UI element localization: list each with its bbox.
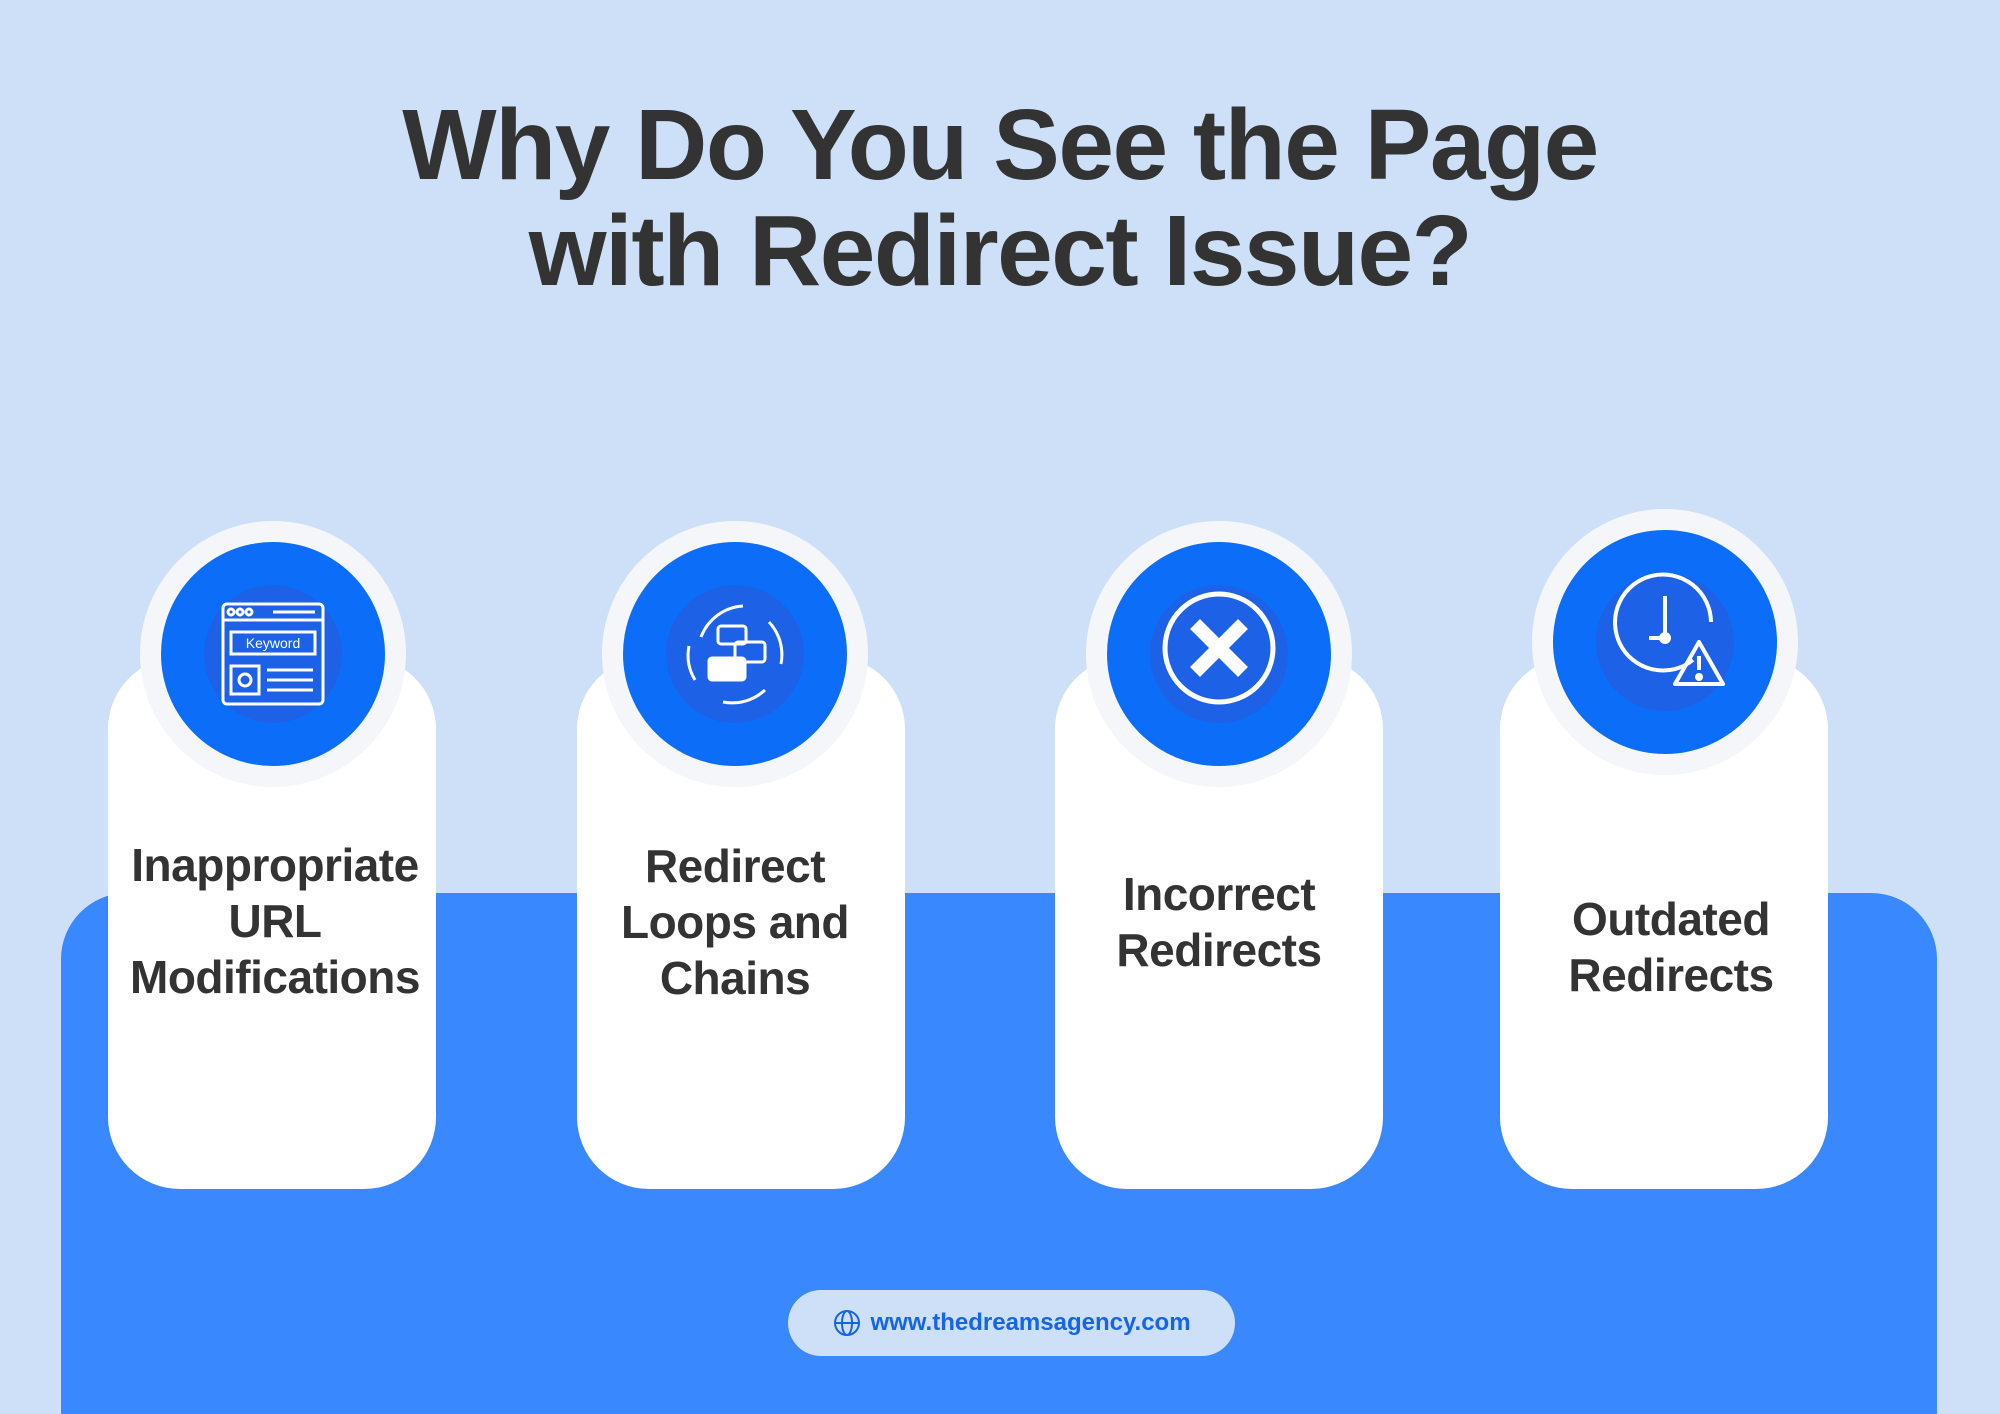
label 4: Redirects <box>1568 949 1774 1001</box>
label 1 <box>130 839 420 1003</box>
label 4 <box>1568 893 1774 1001</box>
label 4: Outdated <box>1572 893 1770 945</box>
icon: chat loop <box>602 521 868 787</box>
card 1 <box>108 657 436 1189</box>
card 2 <box>577 657 905 1189</box>
label 3: Incorrect <box>1123 868 1315 920</box>
label 2 <box>621 840 849 1004</box>
blue bottom panel <box>61 893 1937 1414</box>
website pill <box>788 1290 1235 1356</box>
label 2: Redirect <box>645 840 825 892</box>
label 2: Chains <box>660 952 810 1004</box>
title: with Redirect Issue? <box>529 195 1471 307</box>
icon: keyword browser <box>140 521 406 787</box>
label 3 <box>1116 868 1322 976</box>
label 1: Modifications <box>130 951 420 1003</box>
icon: X circle <box>1086 521 1352 787</box>
website pill: www.thedreamsagency.com <box>870 1309 1191 1336</box>
card 4 <box>1500 657 1828 1189</box>
icon: keyword browser: Keyword <box>246 635 300 651</box>
icon: clock warning <box>1532 509 1798 775</box>
card 3 <box>1055 657 1383 1189</box>
title <box>402 89 1598 307</box>
label 1: URL <box>228 895 322 947</box>
label 2: Loops and <box>621 896 849 948</box>
label 3: Redirects <box>1116 924 1322 976</box>
label 1: Inappropriate <box>131 839 419 891</box>
title: Why Do You See the Page <box>402 89 1598 201</box>
